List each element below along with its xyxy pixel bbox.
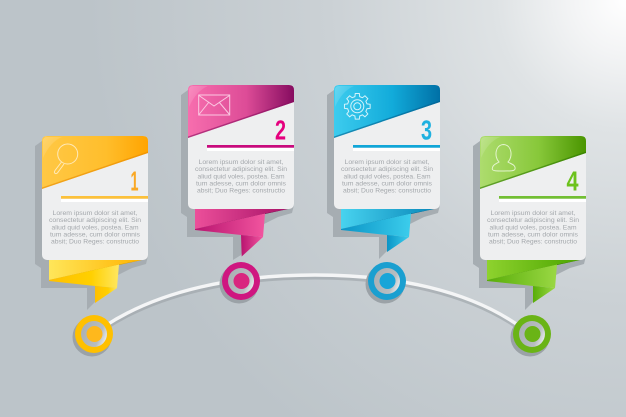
header gloss <box>335 86 354 107</box>
ribbon <box>341 209 434 252</box>
header gloss <box>189 86 208 107</box>
text block: consectetur adipiscing elit. Sin <box>195 166 287 173</box>
icon: gear <box>344 93 370 119</box>
header fold <box>334 100 440 138</box>
node: step 4 <box>510 315 551 356</box>
header fold <box>480 152 586 189</box>
text block: aliud quid voles, postea. Eam <box>490 224 577 231</box>
card body <box>480 136 586 260</box>
node: step 3 <box>366 262 406 304</box>
icon: magnifier <box>54 144 78 174</box>
card shadow <box>473 141 586 310</box>
underline <box>61 196 148 202</box>
header gloss <box>43 137 62 158</box>
number: 3 <box>421 115 432 146</box>
text block: tum adesse, cum dolor omnis <box>50 232 141 238</box>
card header <box>480 136 586 189</box>
text block: aliud quid voles, postea. Eam <box>52 224 139 231</box>
panel: step 3 <box>327 85 440 259</box>
text block <box>195 159 287 195</box>
card shadow <box>327 90 440 259</box>
text block: tum adesse, cum dolor omnis <box>342 180 433 188</box>
ribbon <box>49 260 142 303</box>
header gloss <box>481 137 500 158</box>
card body <box>188 85 294 209</box>
text block: Lorem ipsum dolor sit amet, <box>490 210 576 217</box>
number: 4 <box>566 166 579 197</box>
text block: absit; Duo Reges: constructio <box>51 239 139 246</box>
text block: tum adesse, cum dolor omnis <box>196 180 287 188</box>
icon: user <box>492 144 515 171</box>
curved timeline <box>105 275 522 331</box>
header fold <box>188 100 294 138</box>
ribbon <box>195 209 288 256</box>
underline <box>207 145 294 151</box>
text block: consectetur adipiscing elit. Sin <box>49 217 141 224</box>
text block: aliud quid voles, postea. Eam <box>198 173 285 180</box>
text block: Lorem ipsum dolor sit amet, <box>344 159 430 166</box>
text block <box>341 159 433 195</box>
text block: Lorem ipsum dolor sit amet, <box>52 210 138 217</box>
card header <box>42 136 148 189</box>
card body <box>334 85 440 209</box>
header fold <box>42 152 148 189</box>
underline <box>499 196 586 202</box>
card shadow <box>181 90 294 260</box>
panel: step 2 <box>181 85 294 260</box>
card header <box>188 85 294 138</box>
card shadow <box>35 141 148 310</box>
text block: tum adesse, cum dolor omnis <box>488 232 579 238</box>
underline <box>353 145 440 151</box>
card header <box>334 85 440 138</box>
number: 1 <box>130 166 138 197</box>
panel: step 4 <box>473 136 586 310</box>
ribbon <box>487 260 580 303</box>
text block: absit; Duo Reges: constructio <box>489 239 577 246</box>
text block <box>49 210 141 246</box>
icon: envelope <box>199 95 230 115</box>
text block: absit; Duo Reges: constructio <box>343 188 431 195</box>
node: step 1 <box>72 315 113 356</box>
number: 2 <box>275 115 286 146</box>
text block: consectetur adipiscing elit. Sin <box>487 217 579 224</box>
text block <box>487 210 579 246</box>
node: step 2 <box>220 262 260 304</box>
text block: Lorem ipsum dolor sit amet, <box>198 159 284 166</box>
text block: aliud quid voles, postea. Eam <box>344 173 431 180</box>
panel: step 1 <box>35 136 148 310</box>
card body <box>42 136 148 260</box>
text block: absit; Duo Reges: constructio <box>197 188 285 195</box>
text block: consectetur adipiscing elit. Sin <box>341 166 433 173</box>
